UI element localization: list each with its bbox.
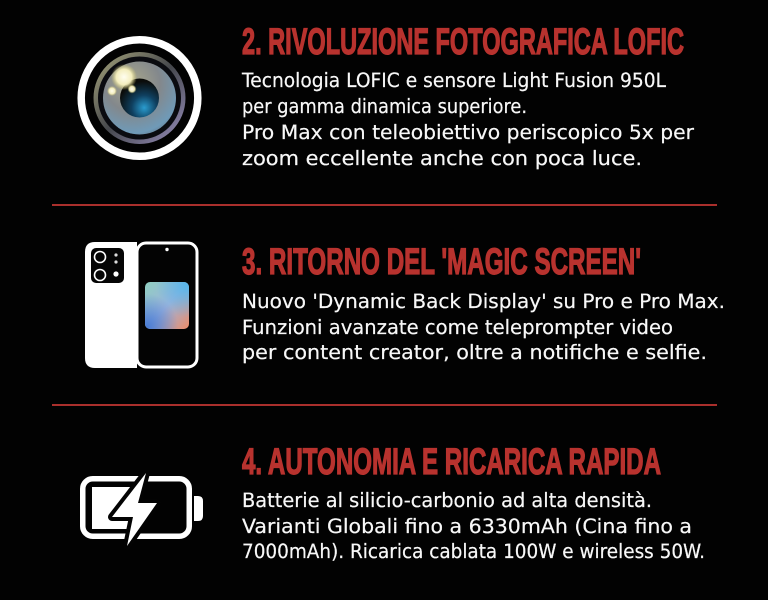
text block: section 4: 7000mAh). Ricarica cablata 100W e wireless 50W.	[242, 540, 705, 563]
text block: section 2: per gamma dinamica superiore.	[242, 95, 527, 118]
text block: section 3	[242, 290, 725, 364]
text block: section 2: zoom eccellente anche con poca luce.	[242, 147, 642, 170]
icon: charging battery	[83, 473, 203, 546]
icon: phones with back display	[85, 242, 197, 368]
phone back	[85, 242, 137, 368]
text block: section 3: Nuovo 'Dynamic Back Display' su Pro e Pro Max.	[242, 290, 725, 313]
text block: section 4: Batterie al silicio-carbonio ad alta densità.	[242, 489, 652, 512]
text block: section 2: Pro Max con teleobiettivo periscopico 5x per	[242, 121, 695, 144]
text block: section 3: Funzioni avanzate come teleprompter video	[242, 316, 673, 339]
text block: section 4	[242, 489, 705, 563]
text block: section 4: Varianti Globali fino a 6330mAh (Cina fino a	[242, 515, 692, 538]
icon: camera lens	[81, 40, 198, 156]
text block: section 2: Tecnologia LOFIC e sensore Light Fusion 950L	[241, 69, 666, 92]
text block: section 3: per content creator, oltre a notifiche e selfie.	[242, 341, 707, 364]
text block: section 2	[241, 69, 695, 170]
phone front	[137, 243, 197, 367]
